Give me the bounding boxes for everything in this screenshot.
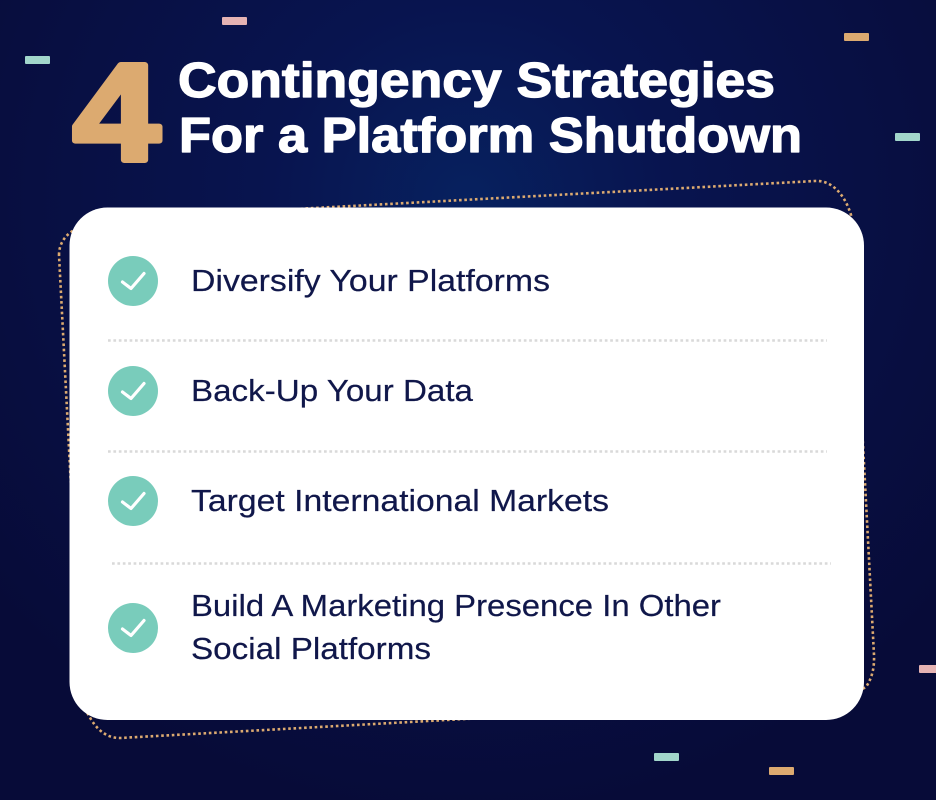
icon: check 4 [108,603,158,653]
icon: check 2 [108,366,158,416]
panel: white card [70,208,864,720]
title: For a Platform Shutdown [179,109,802,163]
dotted tilted outline [59,181,874,738]
divider 1 [108,339,827,342]
divider 3 [112,562,831,565]
item 2 [108,366,474,416]
text: item 4: Build A Marketing Presence In Other [191,588,721,623]
text: item 3: Target International Markets [191,483,609,518]
big number 4: 4 [73,36,160,190]
item 1 [108,256,550,306]
text: item 1: Diversify Your Platforms [191,263,550,298]
text: item 2: Back-Up Your Data [191,373,474,408]
title [178,54,802,163]
title: Contingency Strategies [178,54,775,108]
text: item 4: Social Platforms [191,631,431,666]
divider 2 [108,450,827,453]
item 4 [108,588,721,666]
item 3 [108,476,609,526]
icon: check 1 [108,256,158,306]
icon: check 3 [108,476,158,526]
text: item 4 [191,588,721,666]
